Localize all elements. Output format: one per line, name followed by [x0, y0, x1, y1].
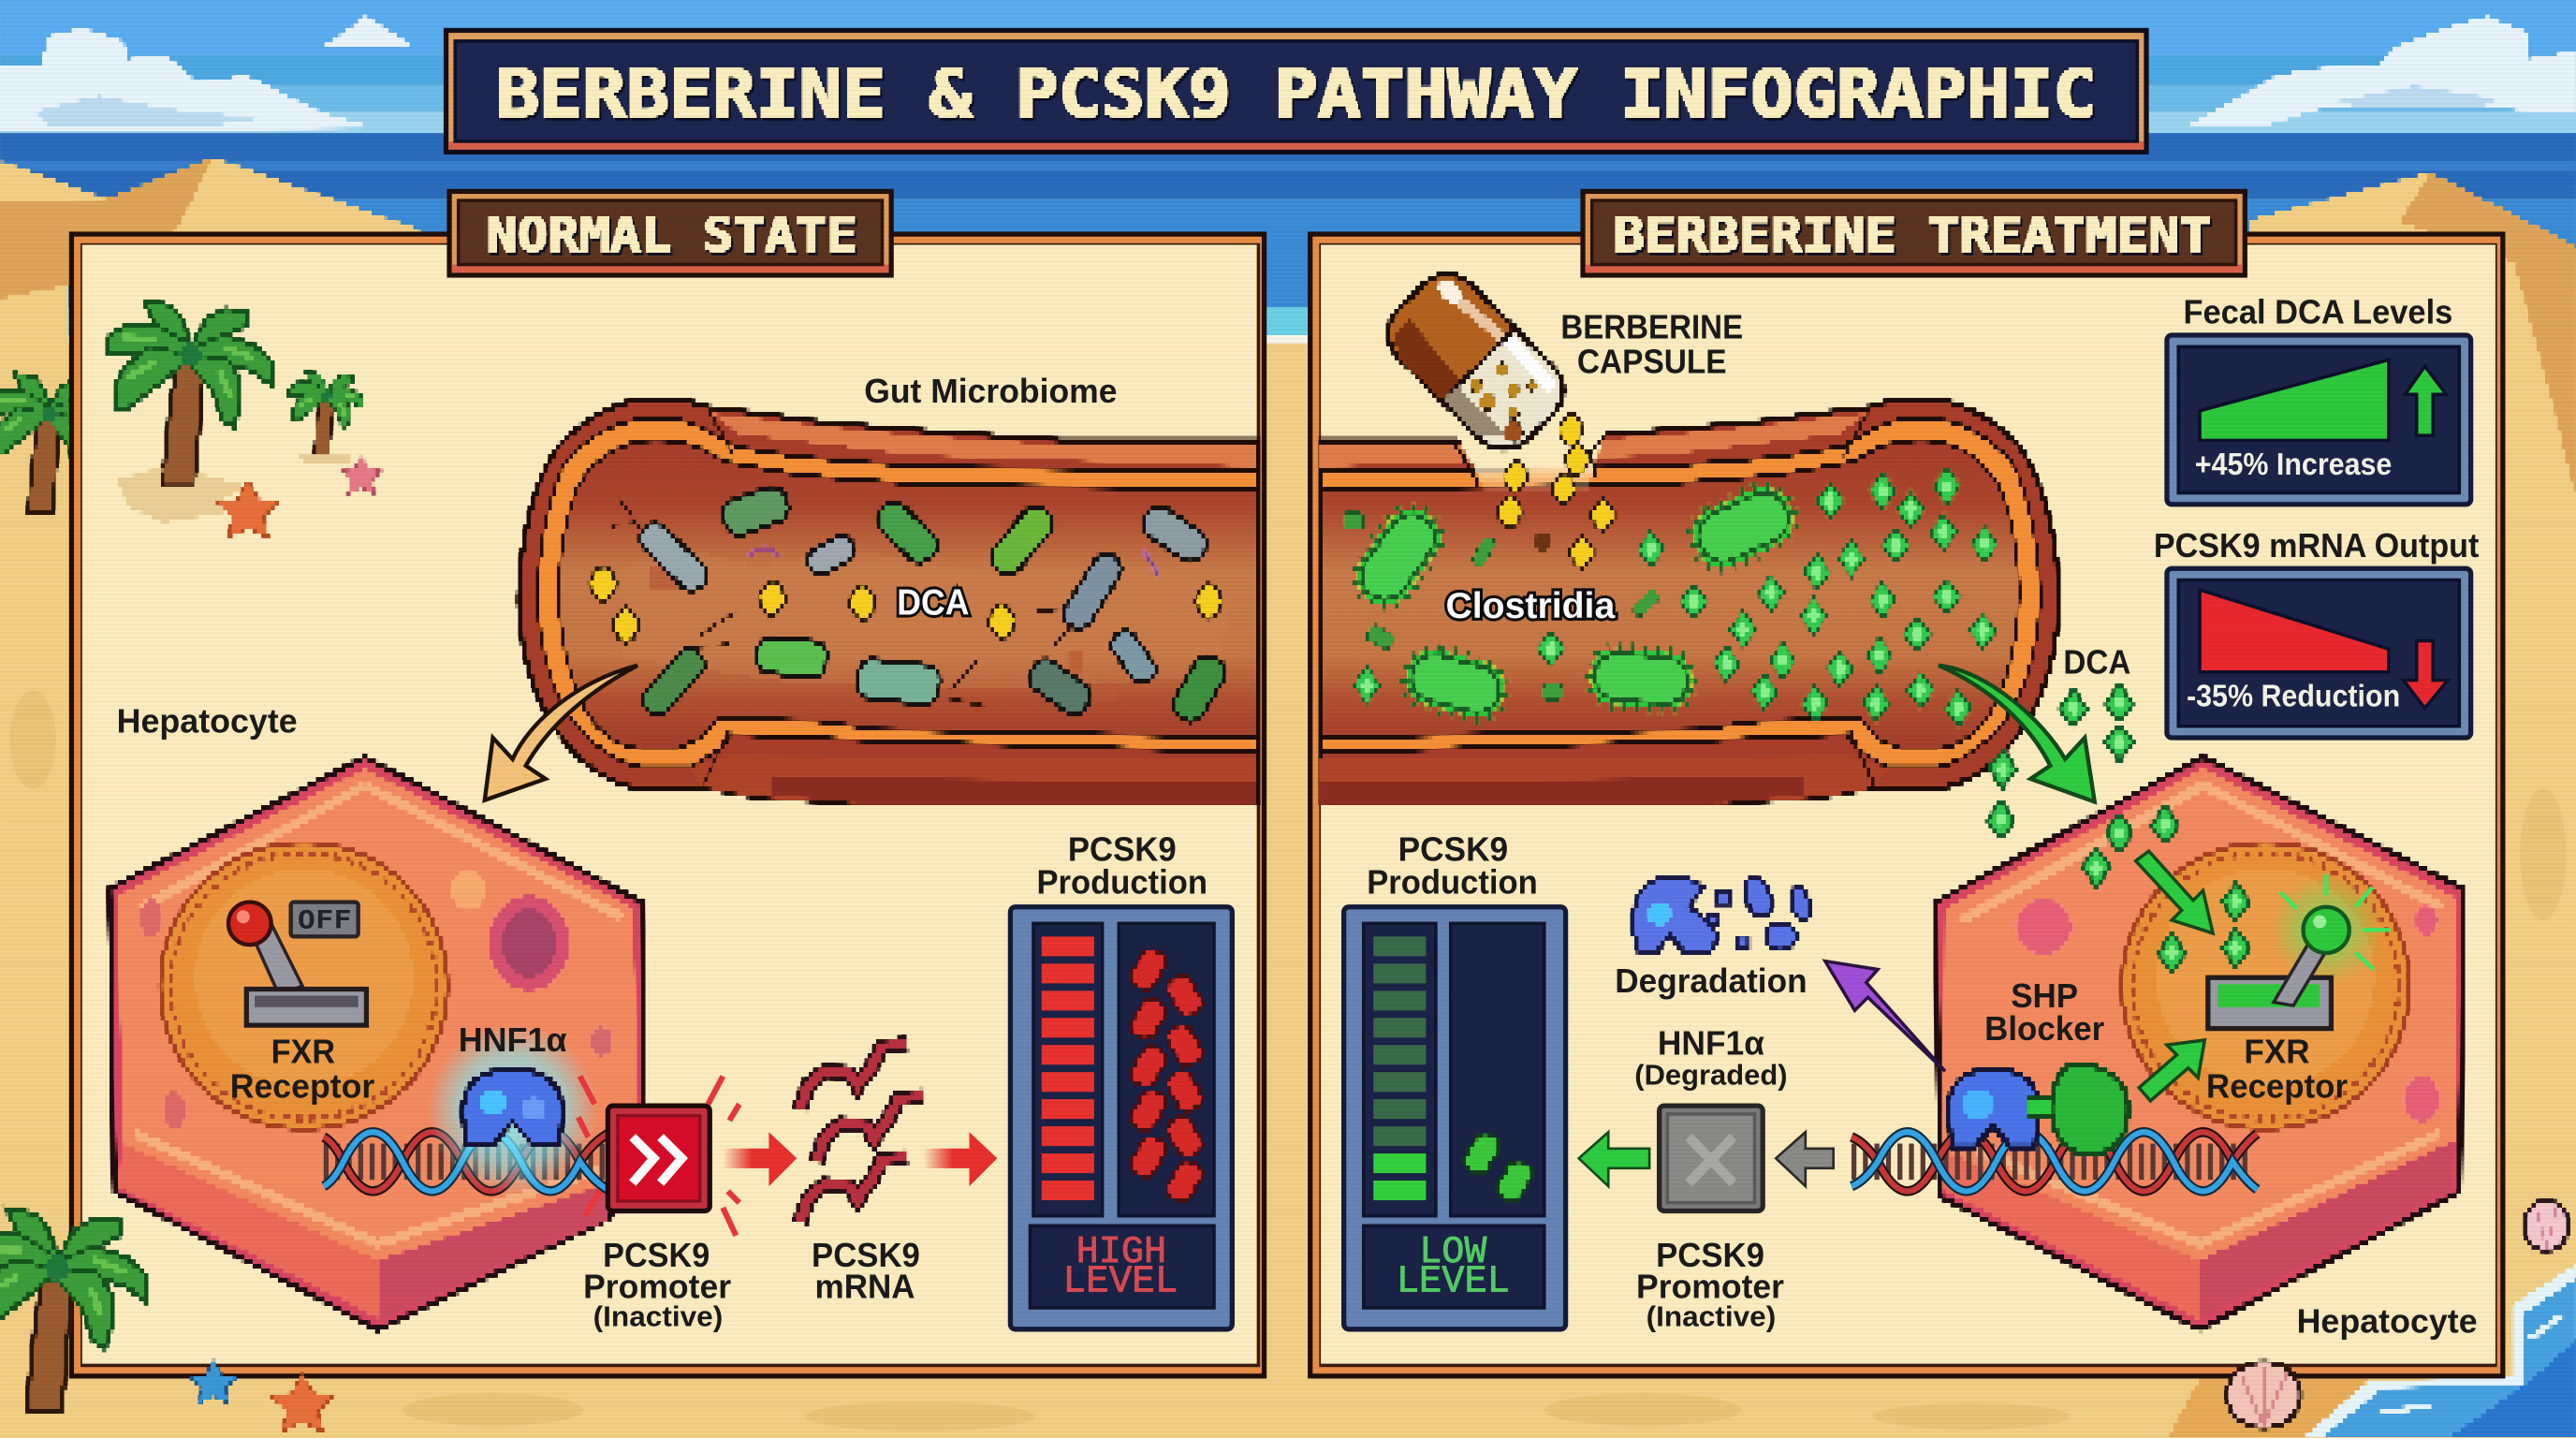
- chart: PCSK9 mRNA output: -35% Reduction: [2187, 680, 2400, 714]
- starfish: blue: [192, 1361, 236, 1403]
- label: berberine capsule: BERBERINE: [1560, 308, 1743, 346]
- HNF1a active, glowing: [427, 1020, 598, 1195]
- gauge: low PCSK9 production: [1344, 907, 1566, 1329]
- decoration: left-edge palm: [0, 374, 110, 513]
- DCA diamonds entering hepatocyte: [1988, 685, 2249, 971]
- tab: normal state: NORMAL STATE: [487, 209, 857, 264]
- label: DCA: DCA: [897, 582, 970, 623]
- arrow: gut to hepatocyte: [485, 666, 637, 800]
- label: PCSK9 promoter: Promoter: [1636, 1267, 1784, 1305]
- gauge: high PCSK9 production: [1010, 907, 1232, 1329]
- arrow: grey, DNA to promoter: [1776, 1132, 1834, 1186]
- arrow: gut to hepatocyte, green: [1939, 666, 2095, 801]
- label: berberine capsule: [1560, 308, 1743, 380]
- label: hepatocyte: Hepatocyte: [117, 702, 298, 741]
- chart: fecal DCA levels: Fecal DCA Levels: [2183, 293, 2452, 331]
- gauge: high PCSK9 production: LEVEL: [1063, 1260, 1178, 1303]
- chart: PCSK9 mRNA output: [2154, 526, 2479, 738]
- bacteria: clostridia: [1344, 479, 1802, 724]
- chart: fecal DCA levels: [2167, 293, 2471, 505]
- nucleus with FXR receptor switch off: [161, 843, 446, 1129]
- arrow: promoter to mRNA: [723, 1132, 797, 1186]
- label: HNF1a degraded: HNF1α: [1658, 1024, 1764, 1063]
- arrow: HNF1a to degradation, purple: [1825, 961, 1945, 1071]
- chart: PCSK9 mRNA output: PCSK9 mRNA Output: [2154, 526, 2479, 565]
- DCA diamonds: elevated: [1354, 468, 1998, 726]
- gauge: low PCSK9 production: LOW: [1419, 1231, 1487, 1274]
- berberine particles: [1498, 414, 1615, 569]
- label: PCSK9 promoter: Promoter: [583, 1267, 731, 1305]
- DNA strand treated: [1852, 1132, 2257, 1191]
- nucleus with FXR receptor switch off: Receptor: [230, 1066, 374, 1105]
- panel: berberine treatment: [1308, 231, 2505, 1378]
- label: PCSK9 production: PCSK9: [1398, 830, 1508, 869]
- tab: berberine treatment: BERBERINE TREATMENT: [1613, 209, 2211, 264]
- label: PCSK9 production: [1367, 830, 1538, 902]
- label: gut microbiome: Gut Microbiome: [864, 372, 1117, 410]
- nucleus with FXR receptor switch off: OFF: [298, 907, 352, 935]
- bacteria: low diversity mix: [634, 483, 1231, 726]
- DNA strand: [324, 1132, 607, 1191]
- seashell: bottom: [2228, 1362, 2300, 1428]
- label: berberine capsule: CAPSULE: [1577, 342, 1727, 380]
- nucleus with FXR receptor switch off: FXR: [271, 1033, 335, 1071]
- nucleus with FXR receptor switch on: FXR: [2244, 1033, 2310, 1071]
- label: SHP blocker: SHP: [2011, 976, 2078, 1015]
- label: PCSK9 mRNA: mRNA: [815, 1267, 915, 1305]
- gauge: low PCSK9 production: LEVEL: [1397, 1260, 1510, 1303]
- arrow: mRNA to production: [923, 1132, 997, 1186]
- gauge: high PCSK9 production: HIGH: [1076, 1231, 1166, 1274]
- label: hepatocyte: Hepatocyte: [2297, 1301, 2478, 1340]
- label: PCSK9 promoter: PCSK9: [603, 1236, 710, 1274]
- starfish: orange: [272, 1375, 332, 1431]
- degraded HNF1a fragments: [1633, 874, 1813, 953]
- label: PCSK9 production: [1036, 830, 1208, 902]
- nucleus with FXR receptor switch on: [2123, 843, 2408, 1129]
- label: PCSK9 promoter: [1636, 1236, 1784, 1332]
- panel: normal state: [69, 231, 1266, 1378]
- label: PCSK9 promoter: PCSK9: [1656, 1236, 1764, 1274]
- seashell: right: [2525, 1201, 2568, 1251]
- label: HNF1a degraded: (Degraded): [1634, 1058, 1788, 1091]
- decoration: bottom-left palm: [0, 1209, 146, 1413]
- hepatocyte cell: [110, 757, 644, 1329]
- tab: normal state: [446, 189, 894, 278]
- starfish: orange: [218, 481, 278, 537]
- PCSK9 promoter active: [578, 1077, 739, 1236]
- label: PCSK9 production: PCSK9: [1068, 830, 1177, 869]
- gut tube treated: [1321, 399, 2058, 803]
- title text: BERBERINE & PCSK9 PATHWAY INFOGRAPHIC: [496, 56, 2096, 133]
- label: PCSK9 mRNA: PCSK9: [812, 1236, 920, 1274]
- berberine capsule: [1375, 261, 1576, 462]
- clouds: [0, 17, 2576, 130]
- tab: berberine treatment: [1580, 189, 2247, 278]
- nucleus with FXR receptor switch on: Receptor: [2206, 1066, 2348, 1105]
- label: HNF1a degraded: [1634, 1024, 1788, 1091]
- HNF1a bound by SHP blocker: [1949, 1064, 2128, 1155]
- title banner: [444, 28, 2149, 154]
- label: PCSK9 mRNA: [812, 1236, 920, 1305]
- label: degradation: Degradation: [1615, 961, 1808, 1000]
- PCSK9 promoter blocked: [1660, 1106, 1763, 1211]
- HNF1a active, glowing: HNF1α: [459, 1020, 567, 1059]
- label: SHP blocker: [1984, 976, 2104, 1048]
- label: SHP blocker: Blocker: [1984, 1009, 2104, 1048]
- hepatocyte cell treated: [1937, 757, 2463, 1329]
- starfish: pink: [343, 457, 381, 493]
- label: PCSK9 promoter: (Inactive): [593, 1299, 723, 1332]
- gut tube with microbes: [520, 399, 1257, 803]
- arrow: FXR to SHP: [2139, 1040, 2204, 1101]
- arrow: DCA into nucleus: [2136, 851, 2213, 933]
- chart: fecal DCA levels: +45% Increase: [2195, 448, 2392, 482]
- label: DCA released: DCA: [2063, 643, 2130, 682]
- bile acid: DCA diamonds: [590, 565, 1222, 644]
- label: PCSK9 promoter: (Inactive): [1647, 1299, 1776, 1332]
- label: PCSK9 promoter: [583, 1236, 731, 1332]
- palm trees in panel: [107, 301, 363, 522]
- mRNA strands: [800, 1043, 923, 1223]
- label: clostridia: Clostridia: [1445, 586, 1616, 626]
- label: PCSK9 production: Production: [1036, 863, 1208, 902]
- label: PCSK9 production: Production: [1367, 863, 1538, 902]
- arrow: green, promoter to production: [1579, 1132, 1649, 1186]
